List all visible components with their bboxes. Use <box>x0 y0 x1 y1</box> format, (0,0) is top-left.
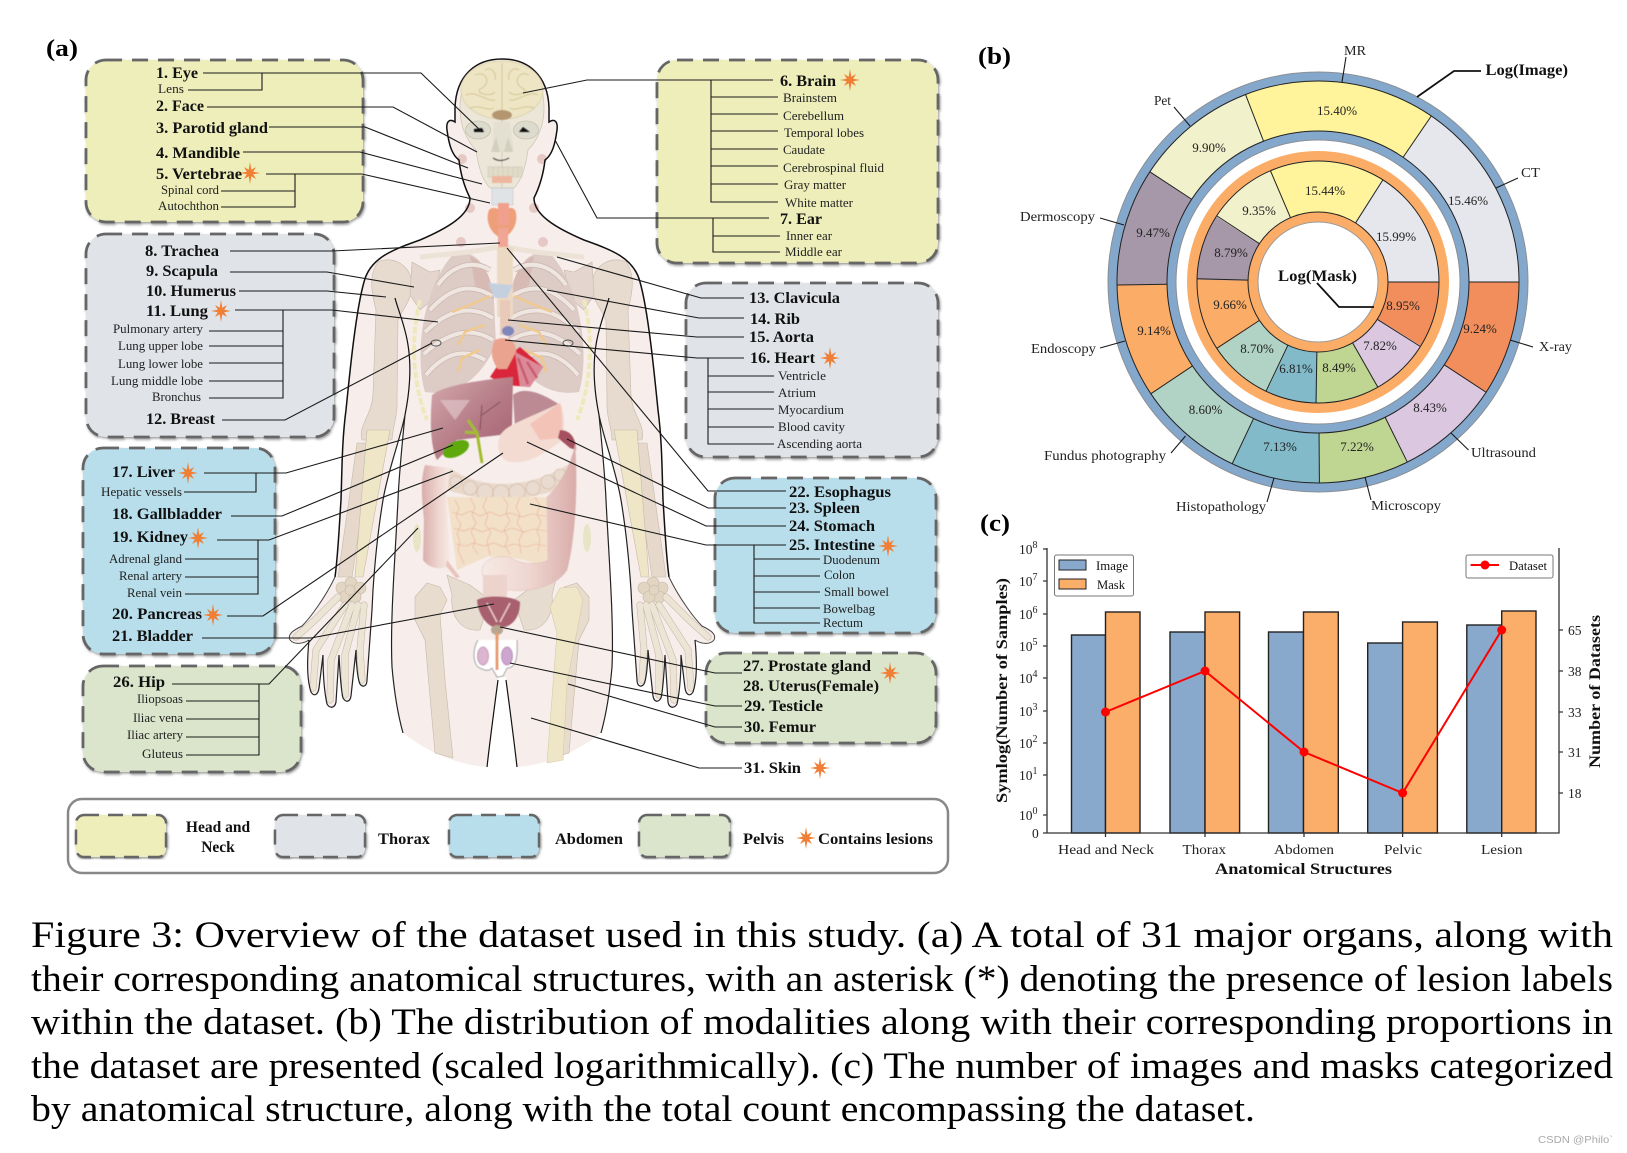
right axis tick labels: 31 <box>1568 745 1582 760</box>
legend: Head and <box>186 819 250 836</box>
legend <box>68 799 948 873</box>
labels: thorax, left: Pulmonary artery <box>113 322 204 336</box>
left axis tick labels: 1 <box>1032 766 1038 777</box>
labels: head and neck, right: Inner ear <box>786 229 833 243</box>
left axis tick labels: 10 <box>1019 671 1032 686</box>
labels: thorax, right: Ventricle <box>778 369 826 383</box>
left axis tick labels: 10 <box>1019 542 1032 557</box>
bars: image <box>1072 625 1502 833</box>
labels: thorax, left: 11. Lung <box>146 303 208 320</box>
left y axis title: Symlog(Number of Samples) <box>994 578 1011 803</box>
labels: abdomen, right: Duodenum <box>823 553 880 567</box>
labels: thorax, right: Blood cavity <box>778 420 846 434</box>
percentages: image ring: 9.47% <box>1136 225 1170 240</box>
percentages: mask ring: 9.66% <box>1213 297 1247 312</box>
labels: pelvis, right: 29. Testicle <box>744 698 823 715</box>
callout: Log(Image) <box>1417 62 1568 97</box>
leader lines <box>172 73 820 768</box>
labels: abdomen, left: 18. Gallbladder <box>112 506 222 523</box>
dataset line <box>1101 626 1506 798</box>
labels: pelvis, right: 27. Prostate gland <box>743 658 871 675</box>
labels: pelvis, left: Iliac vena <box>133 711 183 725</box>
labels: thorax, left: 8. Trachea <box>145 243 219 260</box>
left axis tick labels <box>1019 540 1039 841</box>
percentages: image ring: 7.13% <box>1263 439 1297 454</box>
labels: thorax, right: 15. Aorta <box>749 329 814 346</box>
labels: thorax, left: 10. Humerus <box>146 283 236 300</box>
x axis labels: Abdomen <box>1274 842 1334 857</box>
panel label (b): (b) <box>978 44 1011 70</box>
labels: abdomen, left: 20. Pancreas <box>112 606 202 623</box>
labels: abdomen, left: 17. Liver <box>112 464 175 481</box>
labels: head and neck, left <box>156 65 268 213</box>
labels: abdomen, right: 23. Spleen <box>789 500 860 517</box>
left axis tick labels: 6 <box>1032 605 1038 616</box>
legend: image and mask: Mask <box>1097 578 1126 592</box>
labels: pelvis, left: Iliopsoas <box>137 692 183 706</box>
legend: Abdomen <box>555 831 623 848</box>
labels: head and neck, right: 7. Ear <box>780 211 822 228</box>
right y axis title: Number of Datasets <box>1587 615 1604 768</box>
caption: Figure 3: Overview of the dataset used in this study. (a) A total of 31 major organs, along with <box>31 915 1614 956</box>
percentages: mask ring: 15.99% <box>1376 229 1416 244</box>
label: skin: 31. Skin <box>744 760 801 777</box>
labels: pelvis, right: 28. Uterus(Female) <box>743 678 879 695</box>
percentages: image ring: 9.24% <box>1463 321 1497 336</box>
labels: head and neck, left: 4. Mandible <box>156 145 240 162</box>
panel: thorax, right <box>686 283 938 457</box>
labels: pelvis, right: 30. Femur <box>744 719 816 736</box>
labels: thorax, left: 12. Breast <box>146 411 216 428</box>
panel: head and neck, right <box>657 60 938 263</box>
caption: their corresponding anatomical structures, with an asterisk (*) denoting the presence of lesion labels <box>31 959 1613 1000</box>
labels: abdomen, right: Colon <box>824 568 856 582</box>
right axis tick labels <box>1568 623 1582 801</box>
percentages: mask ring: 8.95% <box>1386 298 1420 313</box>
right axis tick labels: 33 <box>1568 705 1582 720</box>
panel: (c) bar and line chart <box>980 511 1604 878</box>
labels: head and neck, right: Cerebellum <box>783 109 844 123</box>
labels: thorax, left <box>111 243 236 428</box>
labels: thorax, left: Bronchus <box>152 390 201 404</box>
left axis tick labels: 3 <box>1032 702 1038 713</box>
labels: thorax, left: Lung upper lobe <box>118 339 203 353</box>
percentages: mask ring <box>1213 183 1420 376</box>
percentages: mask ring: 8.49% <box>1322 360 1356 375</box>
left axis tick labels: 10 <box>1019 736 1032 751</box>
panel: abdomen, left <box>83 448 275 654</box>
labels: head and neck, right: Gray matter <box>784 178 847 192</box>
percentages: image ring: 15.46% <box>1448 193 1488 208</box>
labels: abdomen, left: Renal vein <box>127 586 183 600</box>
caption <box>31 915 1614 1130</box>
legend: Thorax <box>378 831 430 848</box>
watermark: CSDN @Philo` <box>1538 1134 1613 1146</box>
labels: abdomen, right <box>789 484 891 630</box>
left axis tick labels: 7 <box>1032 572 1038 583</box>
modality labels and ticks: CT <box>1521 165 1541 180</box>
legend: Neck <box>201 839 235 856</box>
percentages: image ring: 9.90% <box>1192 140 1226 155</box>
labels: head and neck, right <box>780 73 885 259</box>
left axis tick labels: 2 <box>1032 734 1038 745</box>
x axis labels: Thorax <box>1182 842 1226 857</box>
labels: head and neck, left: Lens <box>158 82 184 96</box>
panel: thorax, left <box>86 234 334 437</box>
modality labels and ticks: X-ray <box>1539 339 1572 354</box>
labels: head and neck, right: 6. Brain <box>780 73 836 90</box>
x axis title: Anatomical Structures <box>1215 861 1392 878</box>
labels: thorax, left: Lung middle lobe <box>111 374 203 388</box>
labels: pelvis, left: 26. Hip <box>113 674 165 691</box>
lesion star markers <box>178 69 900 779</box>
labels: abdomen, left: Hepatic vessels <box>101 485 182 499</box>
labels: abdomen, right: 24. Stomach <box>789 518 875 535</box>
left axis tick labels: 10 <box>1019 639 1032 654</box>
labels: abdomen, right: 22. Esophagus <box>789 484 891 501</box>
inner ring segments (Log mask) <box>1186 150 1450 414</box>
legend: dataset: Dataset <box>1509 559 1548 573</box>
modality labels and ticks: Microscopy <box>1371 498 1441 513</box>
labels: thorax, right: 14. Rib <box>750 311 800 328</box>
left axis tick labels: 10 <box>1019 768 1032 783</box>
caption: the dataset are presented (scaled logarithmically). (c) The number of images and masks categorized <box>31 1046 1614 1087</box>
legend: Pelvis <box>743 831 784 848</box>
labels: head and neck, right: Brainstem <box>783 91 837 105</box>
left axis tick labels: 10 <box>1019 704 1032 719</box>
labels: head and neck, right: White matter <box>785 196 854 210</box>
labels: head and neck, left: Autochthon <box>158 199 220 213</box>
callout: Log(Image): Log(Image) <box>1486 62 1568 79</box>
labels: pelvis, right <box>743 658 879 736</box>
percentages: image ring: 15.40% <box>1317 103 1357 118</box>
labels: head and neck, left: 1. Eye <box>156 65 198 82</box>
legend: Contains lesions <box>818 831 933 848</box>
modality labels and ticks: Fundus photography <box>1044 448 1166 463</box>
labels: thorax, right <box>749 290 862 451</box>
x axis labels: Head and Neck <box>1058 842 1154 857</box>
left axis tick labels: 8 <box>1032 540 1038 551</box>
labels: thorax, left: Lung lower lobe <box>118 357 203 371</box>
left axis tick labels: 0 <box>1032 826 1039 841</box>
legend: dataset <box>1466 555 1553 578</box>
left axis tick labels: 0 <box>1032 806 1038 817</box>
labels: abdomen, left: 19. Kidney <box>112 529 188 546</box>
percentages: mask ring: 6.81% <box>1279 361 1313 376</box>
left axis tick labels: 10 <box>1019 808 1032 823</box>
labels: thorax, left: 9. Scapula <box>146 263 218 280</box>
labels: head and neck, left: 2. Face <box>156 98 204 115</box>
x axis labels: Pelvic <box>1384 842 1422 857</box>
panel: abdomen, right <box>715 478 936 633</box>
legend: image and mask: Image <box>1096 559 1128 573</box>
panel: pelvis, right <box>706 653 936 743</box>
panel: head and neck, left <box>86 60 363 222</box>
labels: head and neck, left: 5. Vertebrae <box>156 166 242 183</box>
labels: thorax, right: Atrium <box>778 386 816 400</box>
panel label (c): (c) <box>980 511 1010 537</box>
labels: thorax, right: Ascending aorta <box>777 437 862 451</box>
panel: (b) modality donut chart <box>978 37 1572 527</box>
labels: pelvis, left: Gluteus <box>142 747 183 761</box>
callout: Log(Mask): Log(Mask) <box>1278 268 1357 285</box>
panel label (a): (a) <box>46 36 78 62</box>
left axis tick labels: 10 <box>1019 607 1032 622</box>
left axis tick labels: 4 <box>1032 669 1038 680</box>
percentages: mask ring: 8.70% <box>1240 341 1274 356</box>
modality labels and ticks: Ultrasound <box>1471 445 1536 460</box>
labels: abdomen, left: 21. Bladder <box>112 628 193 645</box>
labels: abdomen, left: Adrenal gland <box>109 552 183 566</box>
labels: head and neck, right: Temporal lobes <box>784 126 864 140</box>
labels: abdomen, left: Renal artery <box>119 569 183 583</box>
percentages: mask ring: 15.44% <box>1305 183 1345 198</box>
axes <box>1043 548 1563 837</box>
percentages: mask ring: 8.79% <box>1214 245 1248 260</box>
labels: head and neck, right: Cerebrospinal fluid <box>783 161 885 175</box>
labels: pelvis, left <box>113 674 184 761</box>
labels: thorax, right: Myocardium <box>778 403 844 417</box>
callout: Log(Mask) <box>1278 268 1374 307</box>
labels: pelvis, left: Iliac artery <box>127 728 184 742</box>
outer ring segments (Log image) <box>1073 37 1563 527</box>
panel: (a) anatomical overview <box>46 36 948 873</box>
bars: mask <box>1106 611 1536 833</box>
modality labels and ticks: MR <box>1344 43 1366 58</box>
x axis labels: Lesion <box>1481 842 1523 857</box>
labels: abdomen, right: Rectum <box>823 616 863 630</box>
right axis tick labels: 38 <box>1568 664 1582 679</box>
left axis tick labels: 10 <box>1019 574 1032 589</box>
left axis tick labels: 5 <box>1032 637 1038 648</box>
labels: head and neck, right: Middle ear <box>785 245 843 259</box>
human body illustration <box>289 59 715 767</box>
labels: thorax, right: 13. Clavicula <box>749 290 840 307</box>
modality labels and ticks: Endoscopy <box>1031 341 1096 356</box>
percentages: mask ring: 9.35% <box>1242 203 1276 218</box>
modality labels and ticks <box>1020 43 1572 514</box>
modality labels and ticks: Pet <box>1154 93 1171 108</box>
modality labels and ticks: Histopathology <box>1176 499 1266 514</box>
percentages: image ring: 7.22% <box>1340 439 1374 454</box>
labels: abdomen, left <box>101 464 222 645</box>
right axis tick labels: 18 <box>1568 786 1582 801</box>
right axis tick labels: 65 <box>1568 623 1582 638</box>
percentages: mask ring: 7.82% <box>1363 338 1397 353</box>
labels: thorax, right: 16. Heart <box>750 350 816 367</box>
legend: image and mask <box>1054 555 1134 596</box>
caption: within the dataset. (b) The distribution of modalities along with their corresponding proportions in <box>31 1002 1613 1043</box>
percentages: image ring: 8.60% <box>1189 402 1222 417</box>
panel: pelvis, left <box>83 666 301 772</box>
percentages: image ring <box>1136 103 1497 454</box>
percentages: image ring: 8.43% <box>1413 400 1447 415</box>
labels: head and neck, left: Spinal cord <box>161 183 220 197</box>
labels: abdomen, right: Bowelbag <box>823 602 876 616</box>
labels: head and neck, left: 3. Parotid gland <box>156 120 268 137</box>
labels: head and neck, right: Caudate <box>783 143 825 157</box>
donut rings <box>1073 37 1563 527</box>
x axis labels <box>1058 842 1523 857</box>
percentages: image ring: 9.14% <box>1137 323 1171 338</box>
labels: abdomen, right: Small bowel <box>824 585 890 599</box>
caption: by anatomical structure, along with the total count encompassing the dataset. <box>31 1089 1255 1130</box>
modality labels and ticks: Dermoscopy <box>1020 209 1095 224</box>
labels: abdomen, right: 25. Intestine <box>789 537 875 554</box>
